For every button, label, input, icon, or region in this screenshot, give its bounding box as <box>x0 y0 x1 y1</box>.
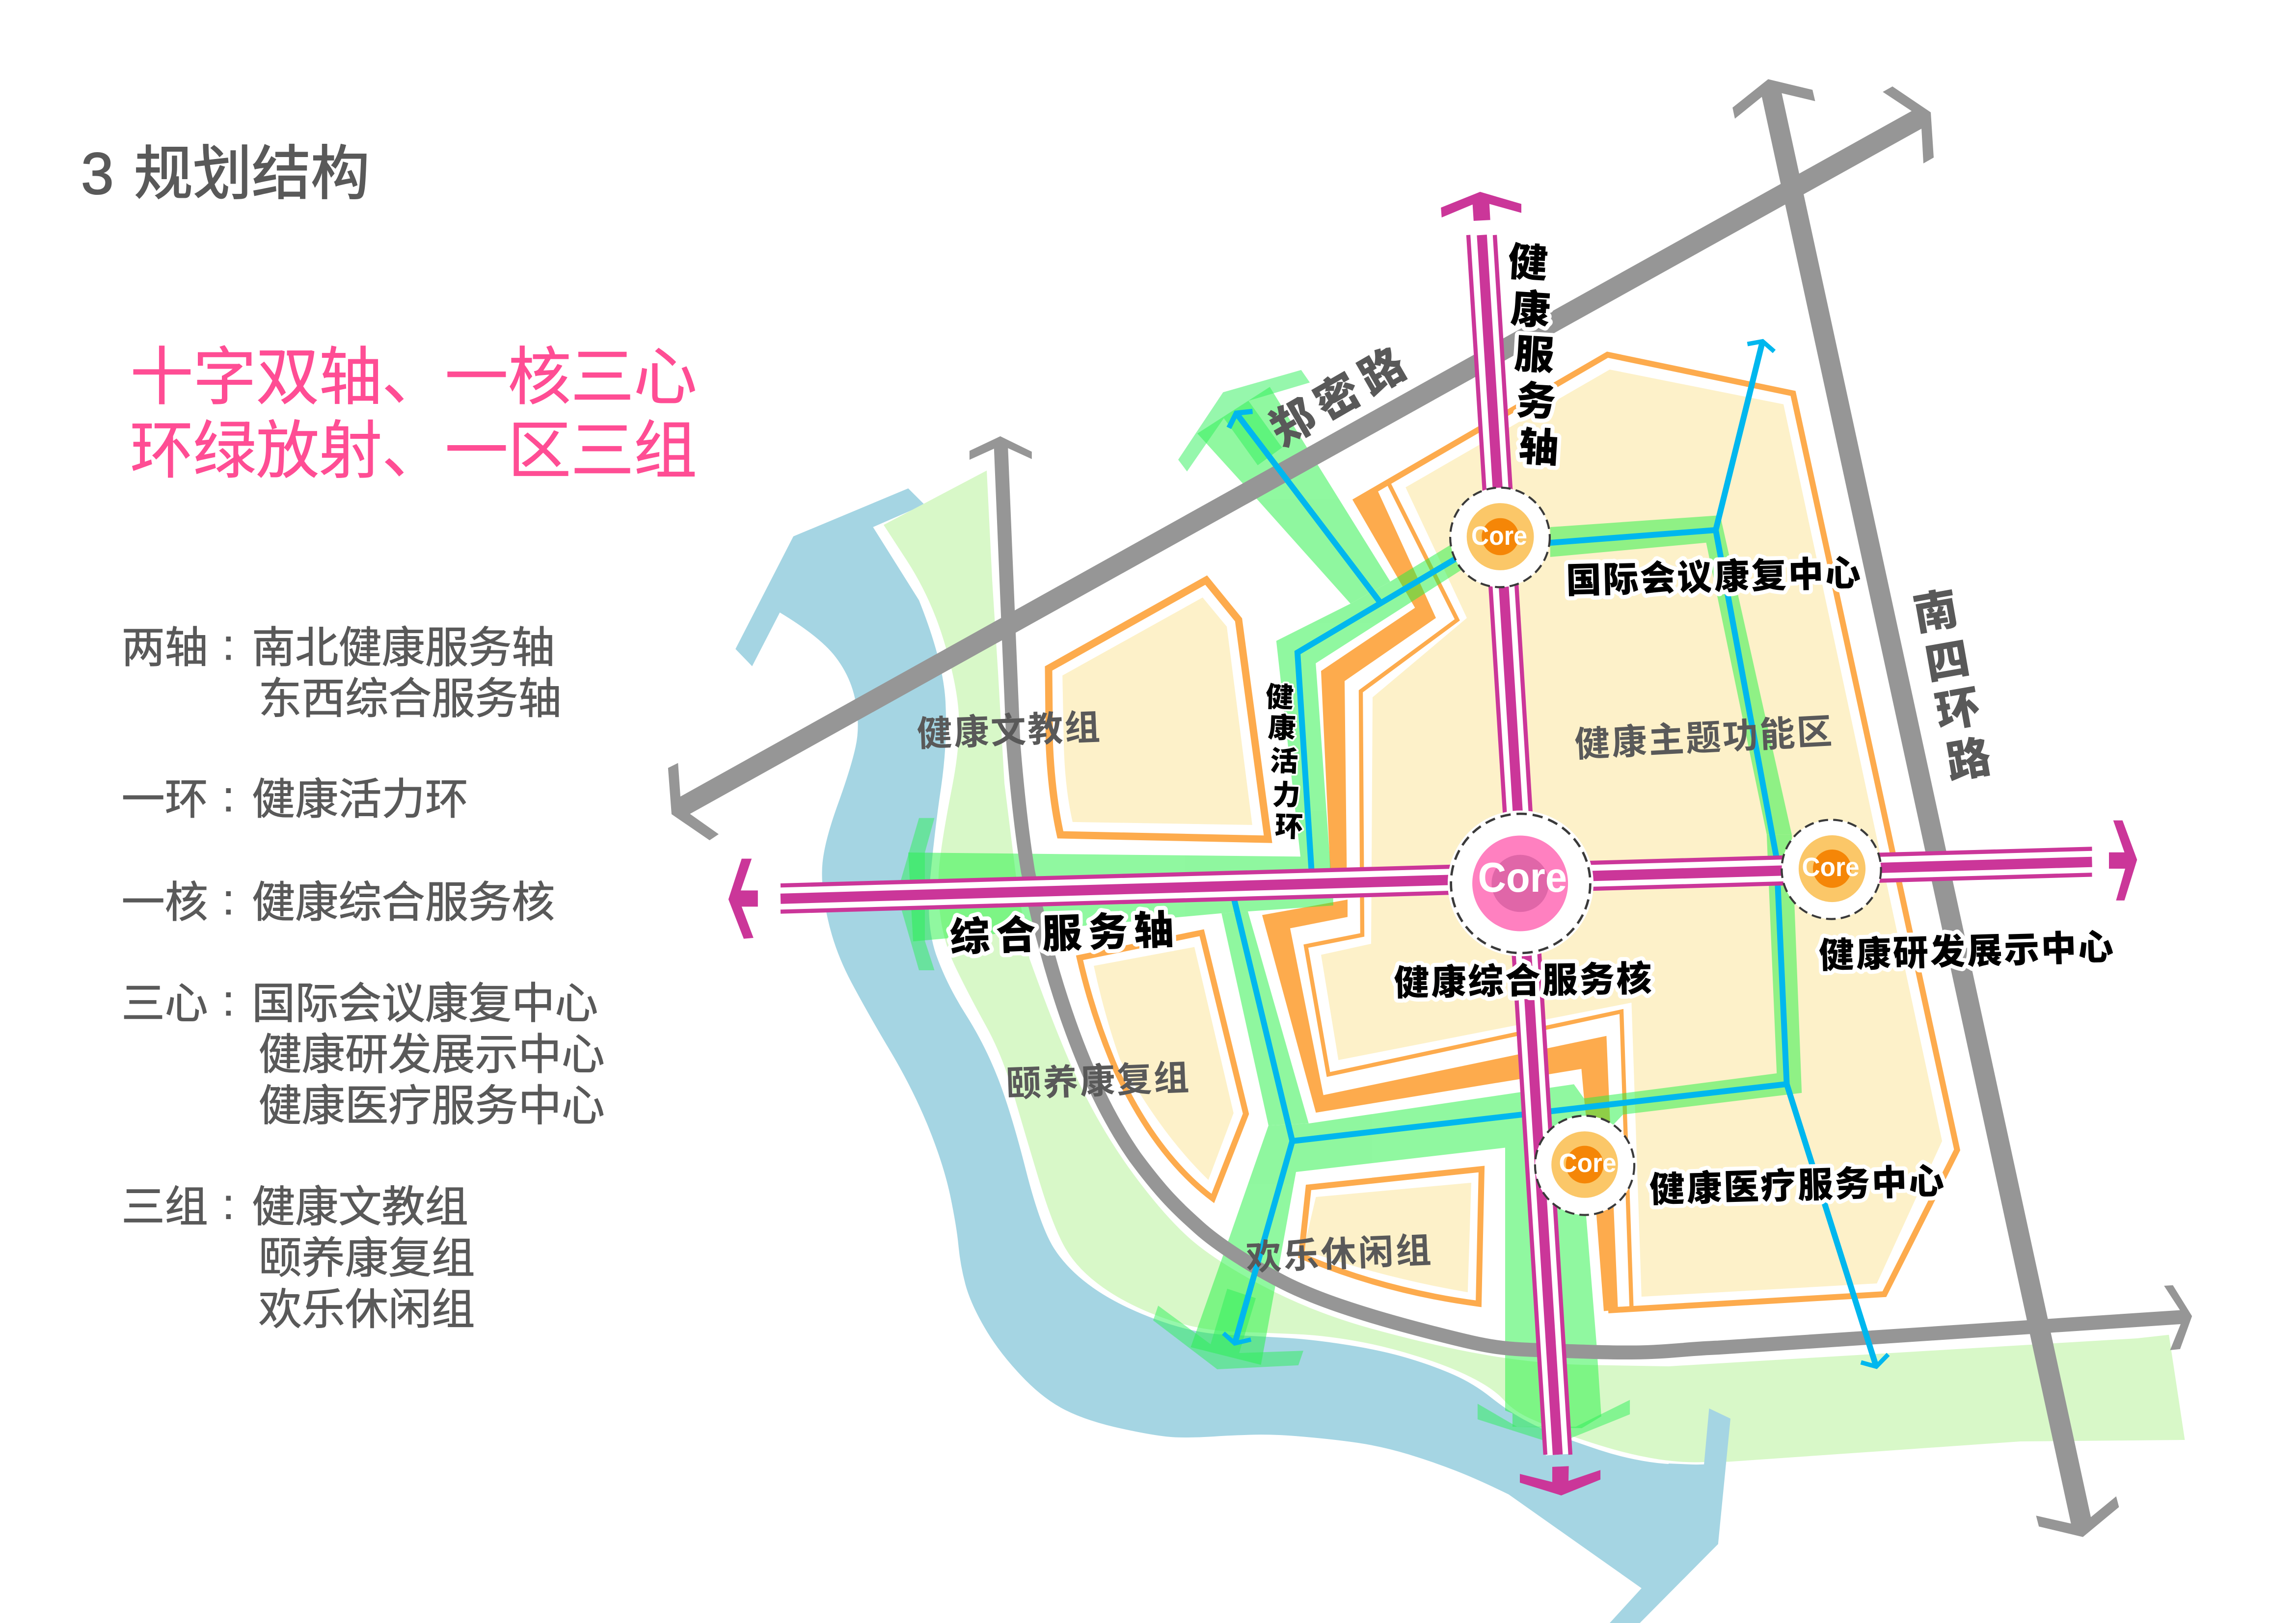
title: 规划结构 <box>134 141 370 207</box>
core: research and exhibition centre <box>1782 820 1881 919</box>
main core: health service core: Core <box>1478 854 1567 901</box>
slogan <box>130 342 697 486</box>
structure list: 国际会议康复中心 <box>252 979 598 1028</box>
core: research and exhibition centre: Core <box>1802 852 1860 882</box>
structure list: 欢乐休闲组 <box>258 1285 475 1334</box>
slogan: 环绿放射、一区三组 <box>130 416 697 486</box>
structure list: 健康综合服务核 <box>252 878 555 927</box>
east-west service axis <box>729 821 2137 939</box>
road label: Zhengmi Road: 郑密路 <box>1262 340 1414 456</box>
core: medical service centre <box>1535 1116 1634 1215</box>
label: theme zone: 健康主题功能区 <box>1573 712 1833 765</box>
plot: leisure group <box>1301 1169 1482 1304</box>
health vitality ring: blue lines <box>1223 341 1888 1367</box>
road: South Fourth Ring arrow <box>1732 79 2119 1537</box>
green arrowheads <box>897 370 1630 1440</box>
title: 3 <box>81 141 114 207</box>
structure list: 健康文教组 <box>252 1183 468 1231</box>
plot: health theme zone <box>1262 355 1957 1311</box>
plot: education group <box>1049 580 1268 839</box>
structure list: 三心 <box>122 979 208 1028</box>
road: curved ring road arrow <box>970 436 2192 1353</box>
structure list: 南北健康服务轴 <box>252 623 555 672</box>
structure list: 健康医疗服务中心 <box>258 1082 605 1130</box>
structure list: 两轴 <box>122 623 208 672</box>
structure list: 东西综合服务轴 <box>258 674 562 723</box>
label: international conference centre: 国际会议康复中心 <box>1566 554 1861 601</box>
structure list: : <box>222 976 235 1025</box>
structure list: 颐养康复组 <box>258 1234 475 1282</box>
core: international conference centre: Core <box>1471 521 1527 551</box>
structure list: 一核 <box>122 878 208 927</box>
riverside green belt <box>884 471 2185 1462</box>
label: research centre: 健康研发展示中心 <box>1818 928 2114 976</box>
ring label: 健康活力环 <box>1265 681 1303 843</box>
core: medical service centre: Core <box>1559 1148 1616 1178</box>
main core: health service core <box>1448 811 1594 957</box>
river <box>735 488 1718 1623</box>
structure list: : <box>222 875 235 924</box>
axis label: north-south: 健康服务轴 <box>1507 240 1560 471</box>
structure list: 三组 <box>122 1183 208 1231</box>
road: Zhengmi Road arrow <box>668 86 1934 840</box>
axis label: east-west: 综合服务轴 <box>949 908 1175 960</box>
plot: rehabilitation group <box>1080 933 1246 1198</box>
structure list: 健康研发展示中心 <box>258 1030 605 1079</box>
river inlet <box>1669 1409 1730 1593</box>
structure list: : <box>222 772 235 821</box>
structure list: : <box>222 620 235 669</box>
structure list: : <box>222 1180 235 1228</box>
slogan: 十字双轴、一核三心 <box>130 342 697 413</box>
green corridors <box>908 387 1802 1428</box>
label: leisure group: 欢乐休闲组 <box>1245 1231 1432 1278</box>
label: service core: 健康综合服务核 <box>1394 959 1652 1003</box>
label: rehabilitation group: 颐养康复组 <box>1005 1058 1189 1105</box>
road label: South Fourth Ring Road: 南四环路 <box>1910 584 1995 788</box>
label: medical centre: 健康医疗服务中心 <box>1649 1162 1945 1210</box>
north-south service axis <box>1441 192 1600 1495</box>
structure list <box>122 620 605 1334</box>
structure list: 一环 <box>122 775 208 824</box>
label: education group: 健康文教组 <box>916 708 1101 754</box>
structure list: 健康活力环 <box>252 775 468 824</box>
core: international conference centre <box>1450 488 1550 587</box>
